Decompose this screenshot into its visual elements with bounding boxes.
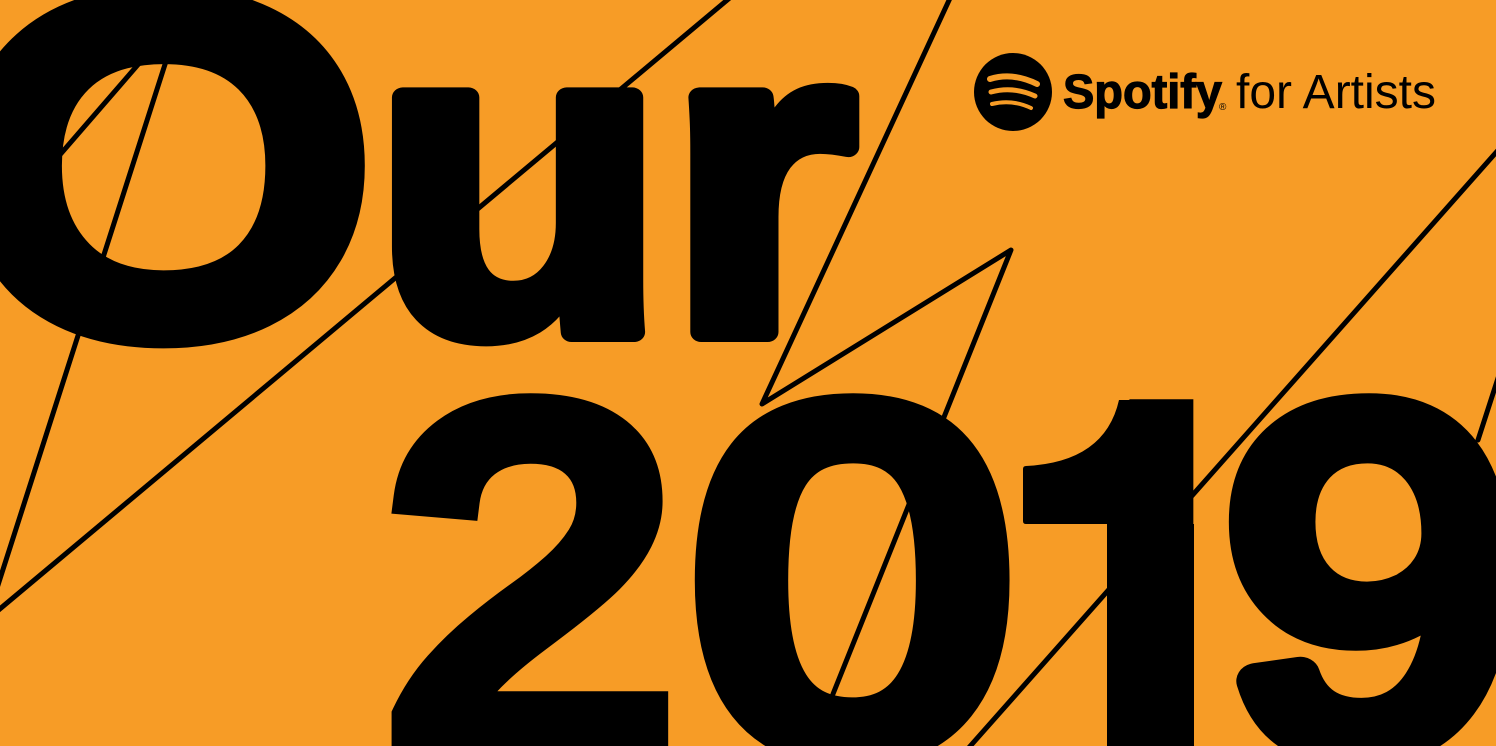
registered mark: ® — [1219, 102, 1227, 113]
wordmark: for Artists: for Artists — [1236, 66, 1436, 119]
wordmark: Spotify: Spotify — [1063, 66, 1222, 119]
icon: Spotify circle — [974, 53, 1052, 131]
title: Our — [0, 0, 856, 427]
title: 2019 — [391, 393, 1496, 746]
logo: Spotify for Artists — [974, 53, 1436, 131]
